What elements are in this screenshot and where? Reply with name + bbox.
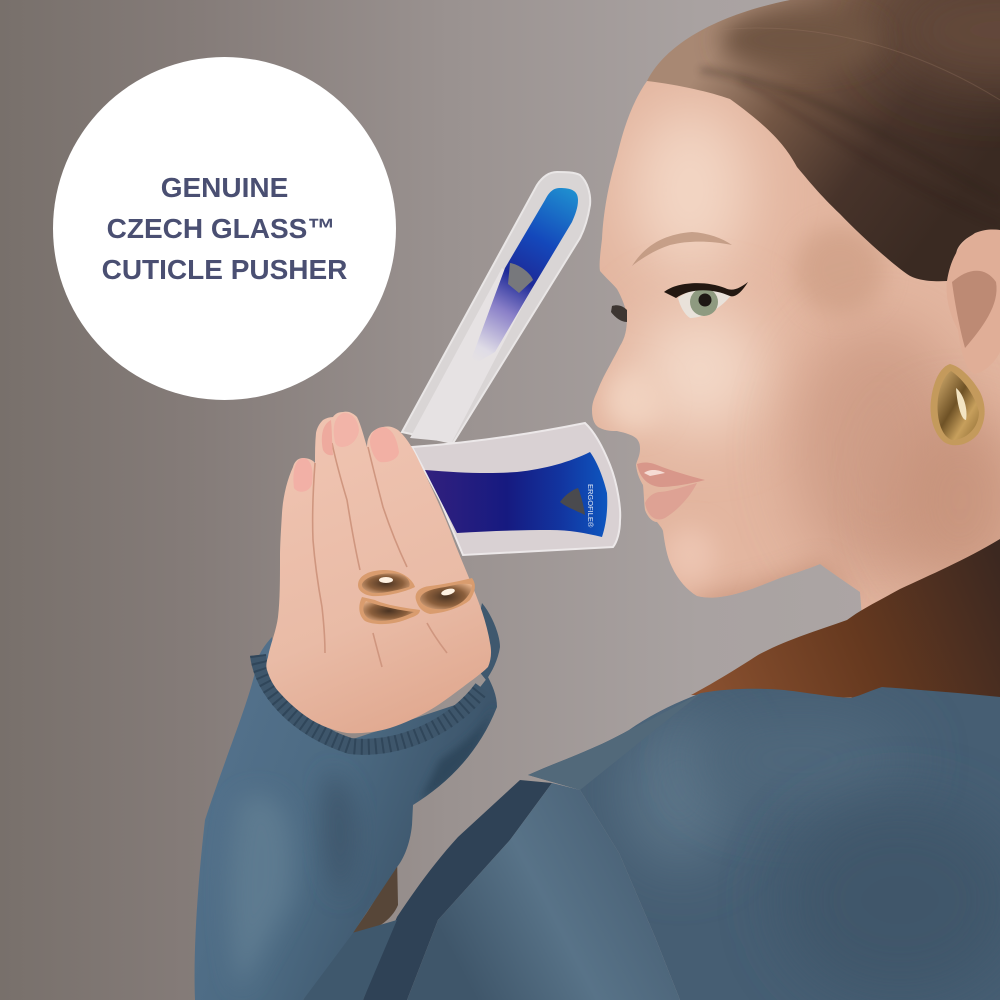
bottom ring — [359, 597, 420, 624]
upper arm panel — [407, 783, 680, 1000]
ring finger nail — [322, 420, 333, 455]
case — [412, 423, 620, 555]
blue blade — [468, 188, 578, 368]
upright glass file in case — [402, 172, 590, 443]
lips — [637, 462, 705, 520]
right ring — [416, 578, 475, 614]
brand text: ERGOFILE® — [586, 484, 595, 528]
shoulder body — [528, 687, 1000, 1000]
back sleeve shadow — [363, 780, 552, 1000]
woman portrait — [592, 0, 1000, 700]
lower sleeve piece — [303, 920, 397, 1000]
file blade — [425, 452, 607, 537]
palm and fingers — [266, 412, 491, 733]
finger creases — [313, 443, 447, 667]
eye — [611, 282, 748, 322]
white circle callout — [53, 57, 396, 400]
ponytail — [691, 539, 1000, 700]
face and neck — [592, 60, 1000, 630]
eyebrow — [632, 232, 732, 266]
middle finger nail — [334, 413, 359, 447]
index finger nail — [370, 427, 399, 462]
frosted blade — [410, 268, 530, 442]
pinky nail — [293, 458, 313, 492]
ear — [947, 229, 1000, 374]
hair — [647, 0, 1000, 281]
case — [402, 172, 590, 443]
callout text: GENUINE — [161, 172, 288, 203]
elastic cuff — [258, 655, 482, 747]
hair tie on wrist — [350, 855, 398, 936]
logo — [560, 488, 585, 515]
top ring — [358, 570, 415, 596]
rings — [358, 570, 475, 624]
earring — [931, 364, 985, 445]
sleeve — [195, 637, 497, 1000]
sleeve behind hand — [470, 603, 500, 680]
callout text: CZECH GLASS™ — [107, 213, 335, 244]
horizontal glass file in case — [412, 423, 620, 555]
logo — [508, 263, 533, 293]
callout text — [102, 172, 347, 285]
hand — [266, 412, 491, 733]
callout text: CUTICLE PUSHER — [102, 254, 347, 285]
blouse — [363, 687, 1000, 1000]
